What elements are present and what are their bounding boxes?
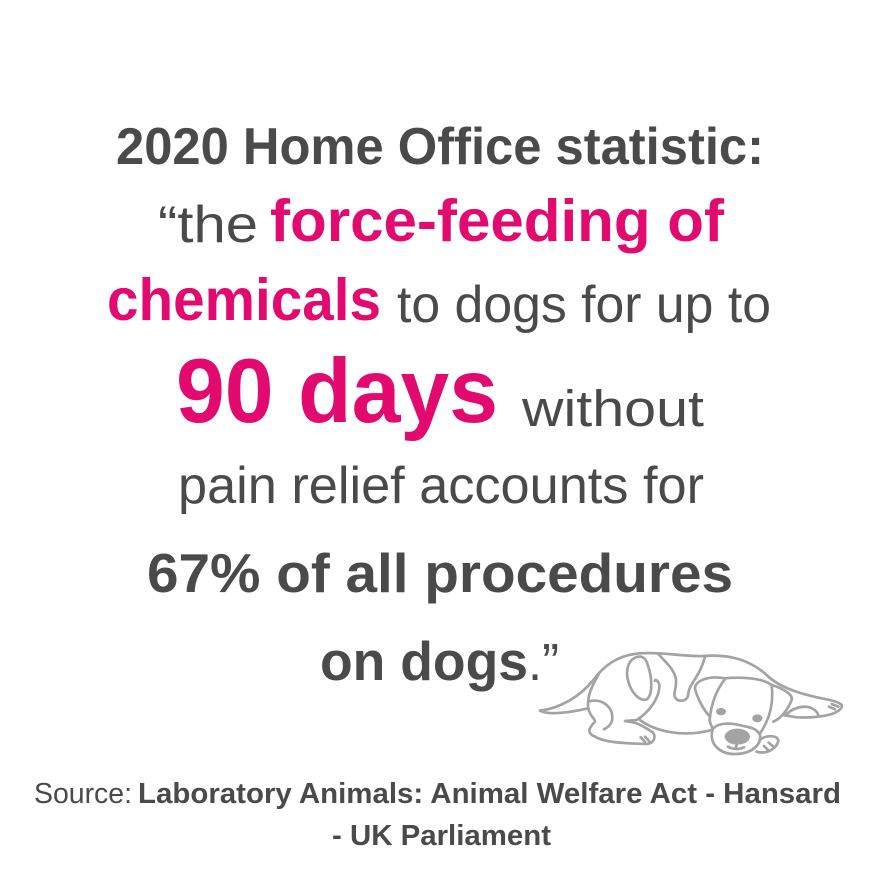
quote line: 90 days without: 90 days <box>176 341 498 442</box>
quote line: pain relief accounts for: pain relief accounts for <box>178 457 704 515</box>
source line 1: Laboratory Animals: Animal Welfare Act - Hansard <box>138 778 841 810</box>
quote line: chemicals to dogs for up to: chemicals <box>107 267 381 333</box>
quote line: on dogs: on dogs <box>320 630 528 692</box>
quote line: 67% of all procedures: 67% of all procedures <box>147 542 733 604</box>
quote line: the force-feeding of: force-feeding of <box>270 188 724 254</box>
quote line: chemicals to dogs for up to: to dogs for up to <box>397 276 771 334</box>
quote line: on dogs: .” <box>528 634 559 692</box>
heading: statistic title: 2020 Home Office statistic: <box>116 118 764 176</box>
source line 2: - UK Parliament <box>332 820 551 852</box>
quote line: 90 days without <box>176 341 704 442</box>
quote line: chemicals to dogs for up to <box>107 267 771 334</box>
quote line: the force-feeding of: “the <box>158 196 258 254</box>
source line 1: Source: <box>34 778 132 810</box>
quote line: 90 days without: without <box>521 380 704 437</box>
icon: sleeping dog <box>540 653 842 754</box>
